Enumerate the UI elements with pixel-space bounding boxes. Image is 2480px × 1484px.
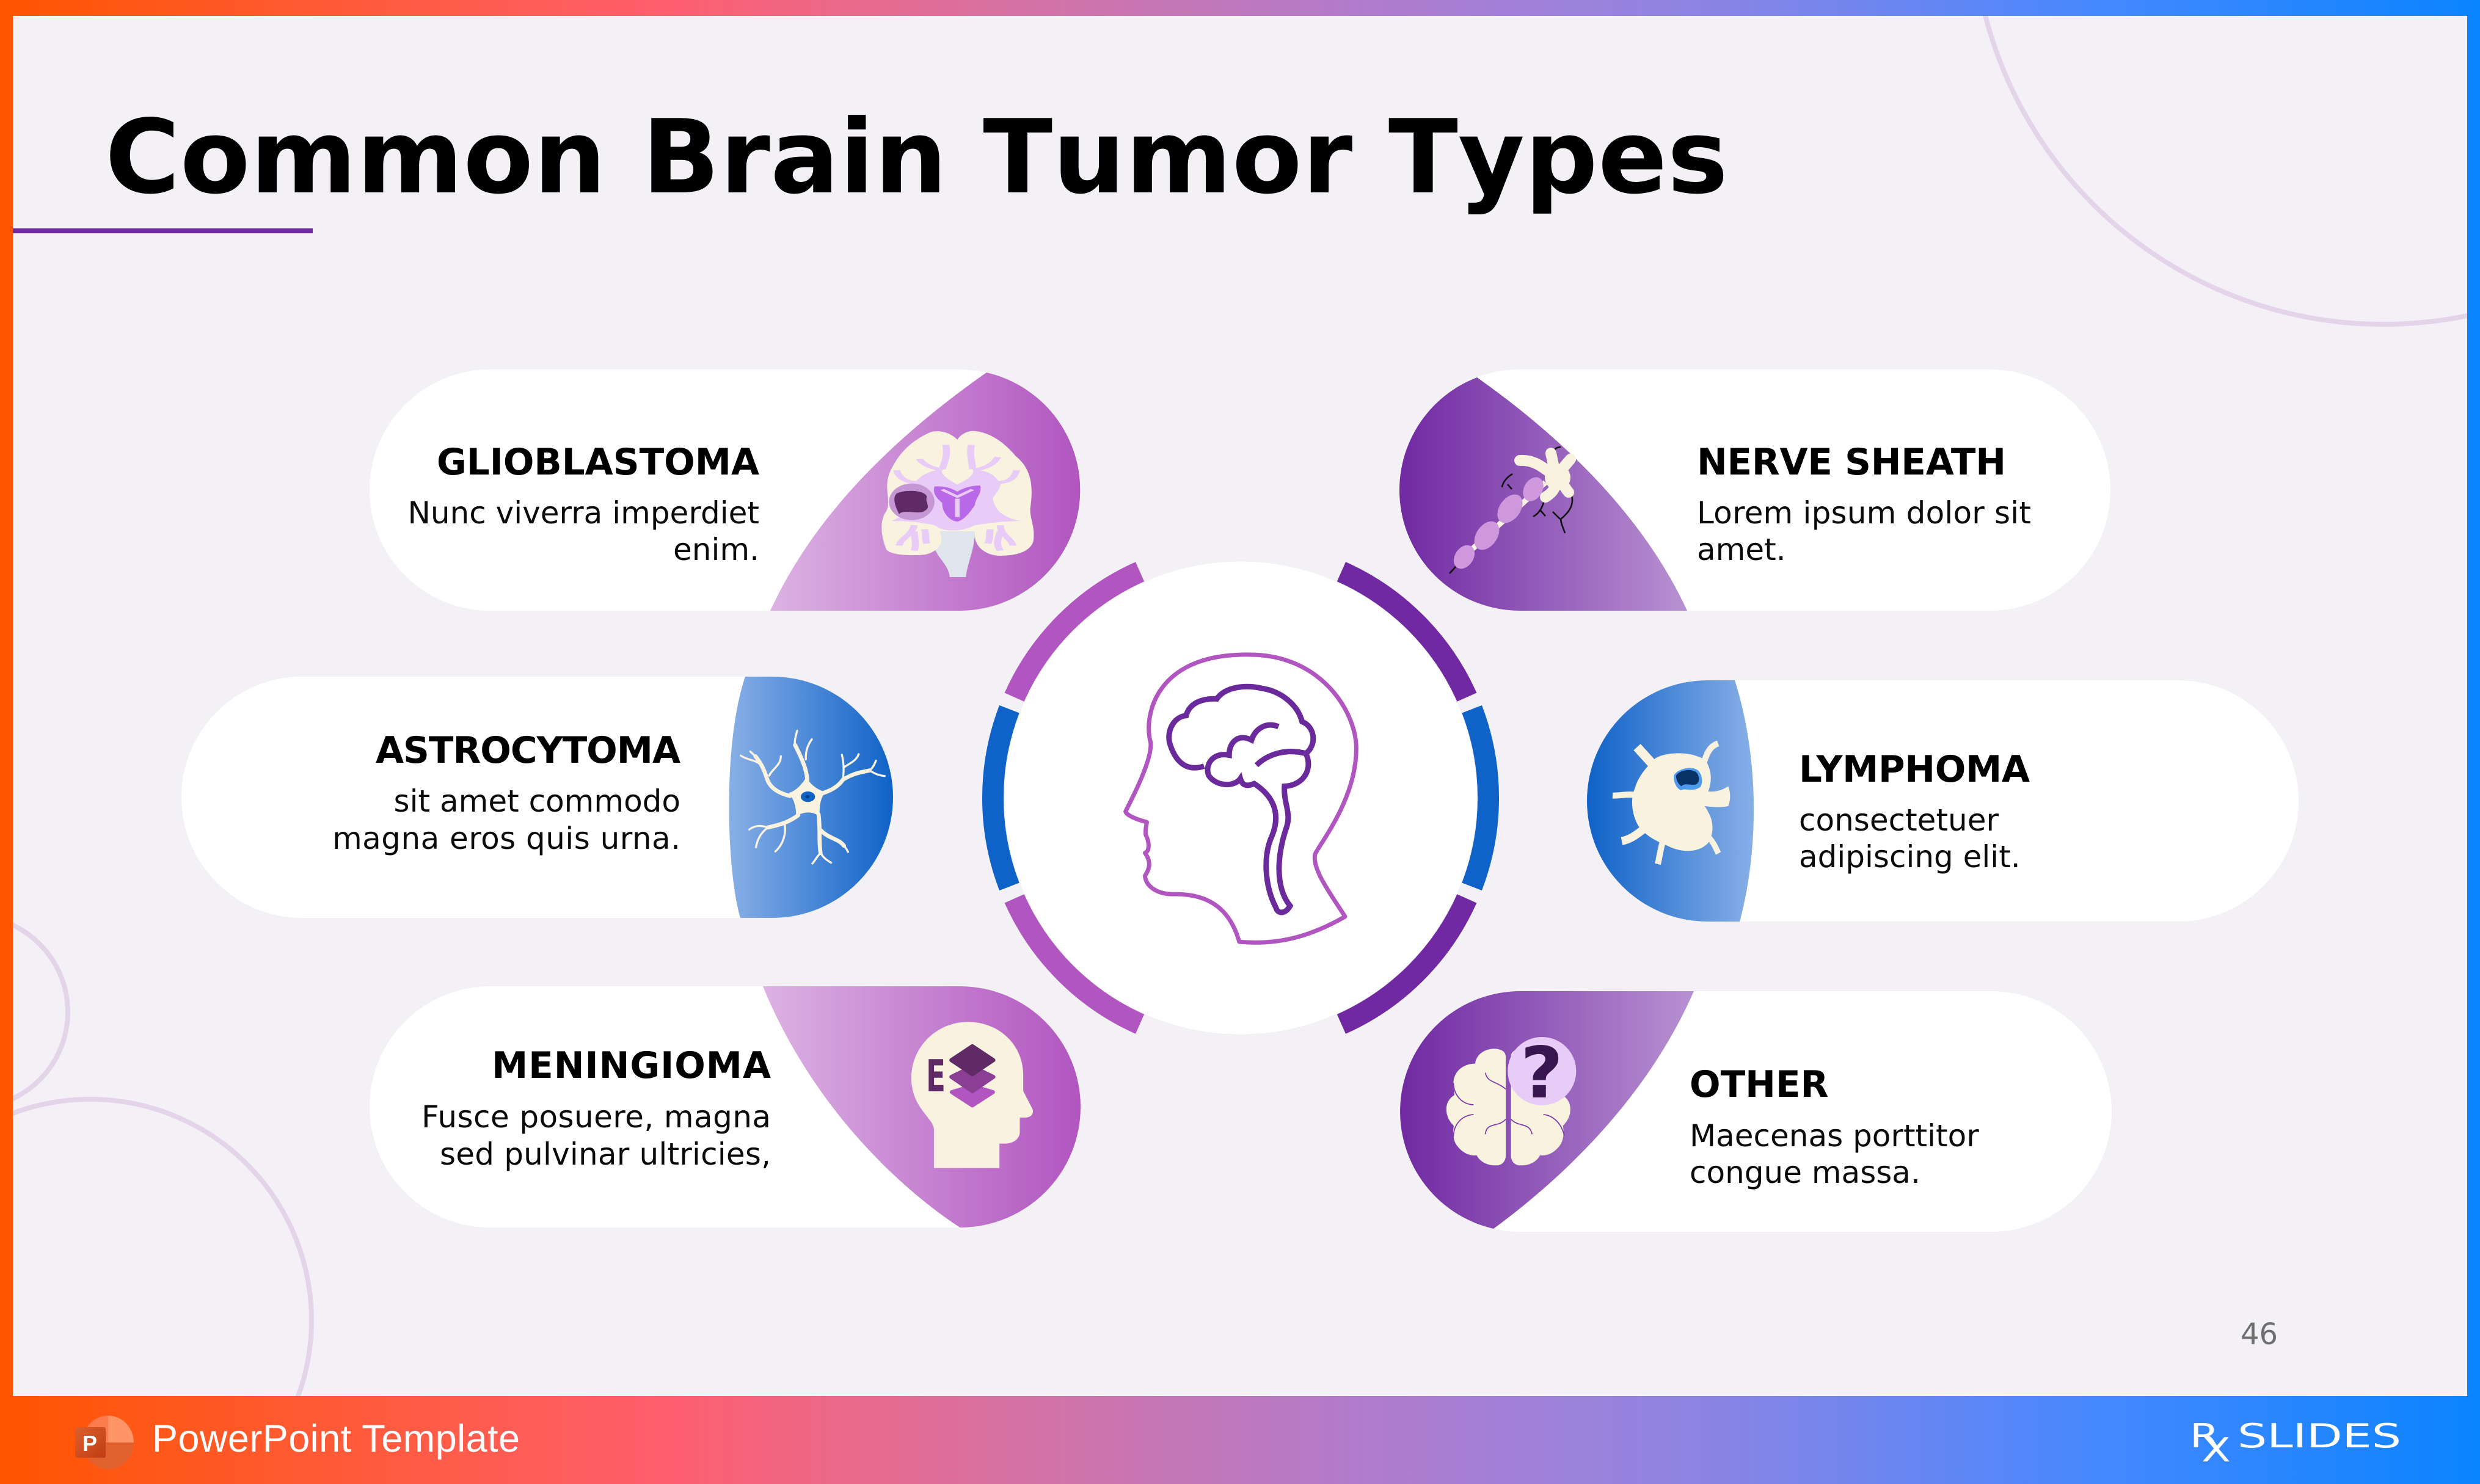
text: nerve sheath description: Lorem ipsum dolor sit	[1697, 495, 2031, 531]
icon: head with layers	[911, 1022, 1033, 1168]
center white circle	[1004, 562, 1477, 1035]
logo: RxSlides: SLIDES	[2237, 1417, 2401, 1455]
icon: lymphoma cell	[1613, 743, 1730, 864]
panel: lymphoma	[1587, 680, 2299, 922]
panel: other	[1400, 991, 2112, 1232]
icon: brain with question mark	[1446, 1032, 1576, 1165]
segmented ring	[993, 572, 1489, 1024]
text: lymphoma description: consectetuer	[1799, 802, 1999, 838]
icon: PowerPoint logo	[75, 1416, 134, 1469]
text: other description: Maecenas porttitor	[1690, 1118, 1979, 1154]
title underline	[13, 228, 313, 233]
text: lymphoma description: adipiscing elit.	[1799, 839, 2021, 875]
icon: PowerPoint logo: P	[82, 1431, 97, 1456]
footer bar	[0, 1396, 2480, 1484]
text: nerve sheath description: amet.	[1697, 532, 1786, 567]
text: glioblastoma description: Nunc viverra imperdiet	[407, 495, 759, 531]
text: other description: congue massa.	[1690, 1155, 1920, 1190]
title: Common Brain Tumor Types	[105, 98, 1728, 217]
panel: glioblastoma	[370, 369, 1081, 611]
heading: meningioma: MENINGIOMA	[492, 1045, 771, 1087]
central head diagram	[993, 562, 1489, 1035]
heading: other: OTHER	[1690, 1064, 1828, 1106]
text: nerve sheath description	[1697, 495, 2031, 567]
heading: glioblastoma: GLIOBLASTOMA	[437, 442, 759, 484]
icon: head profile with brain and spinal cord	[1126, 655, 1356, 942]
text: lymphoma description	[1799, 802, 2021, 875]
text: other description	[1690, 1118, 1979, 1190]
panel: astrocytoma	[181, 677, 893, 918]
text: meningioma description: sed pulvinar ultricies,	[440, 1137, 771, 1172]
icon: coronal brain section with tumor	[881, 431, 1034, 577]
logo: RxSlides: R	[2190, 1417, 2219, 1455]
icon: myelinated nerve cell	[1450, 447, 1572, 573]
heading: nerve sheath: NERVE SHEATH	[1697, 442, 2006, 484]
text: glioblastoma description	[407, 495, 759, 567]
text: glioblastoma description: enim.	[673, 532, 759, 567]
heading: lymphoma: LYMPHOMA	[1799, 749, 2030, 791]
icon: astrocyte cell	[741, 731, 884, 864]
heading: astrocytoma: ASTROCYTOMA	[376, 730, 680, 772]
logo: RxSlides	[2190, 1417, 2401, 1469]
page number: 46	[2241, 1317, 2278, 1351]
logo: RxSlides: X	[2201, 1431, 2231, 1469]
panel: meningioma	[370, 986, 1081, 1228]
text: astrocytoma description: sit amet commodo	[394, 784, 680, 819]
icon: head with layers: E	[926, 1050, 946, 1102]
text: meningioma description: Fusce posuere, magna	[421, 1099, 771, 1135]
text: astrocytoma description	[332, 784, 680, 856]
text: meningioma description	[421, 1099, 771, 1172]
icon: brain with question mark: ?	[1520, 1032, 1563, 1115]
text: astrocytoma description: magna eros quis urna.	[332, 821, 680, 856]
panel: nerve sheath	[1399, 369, 2110, 611]
footer label: PowerPoint Template	[152, 1417, 520, 1460]
